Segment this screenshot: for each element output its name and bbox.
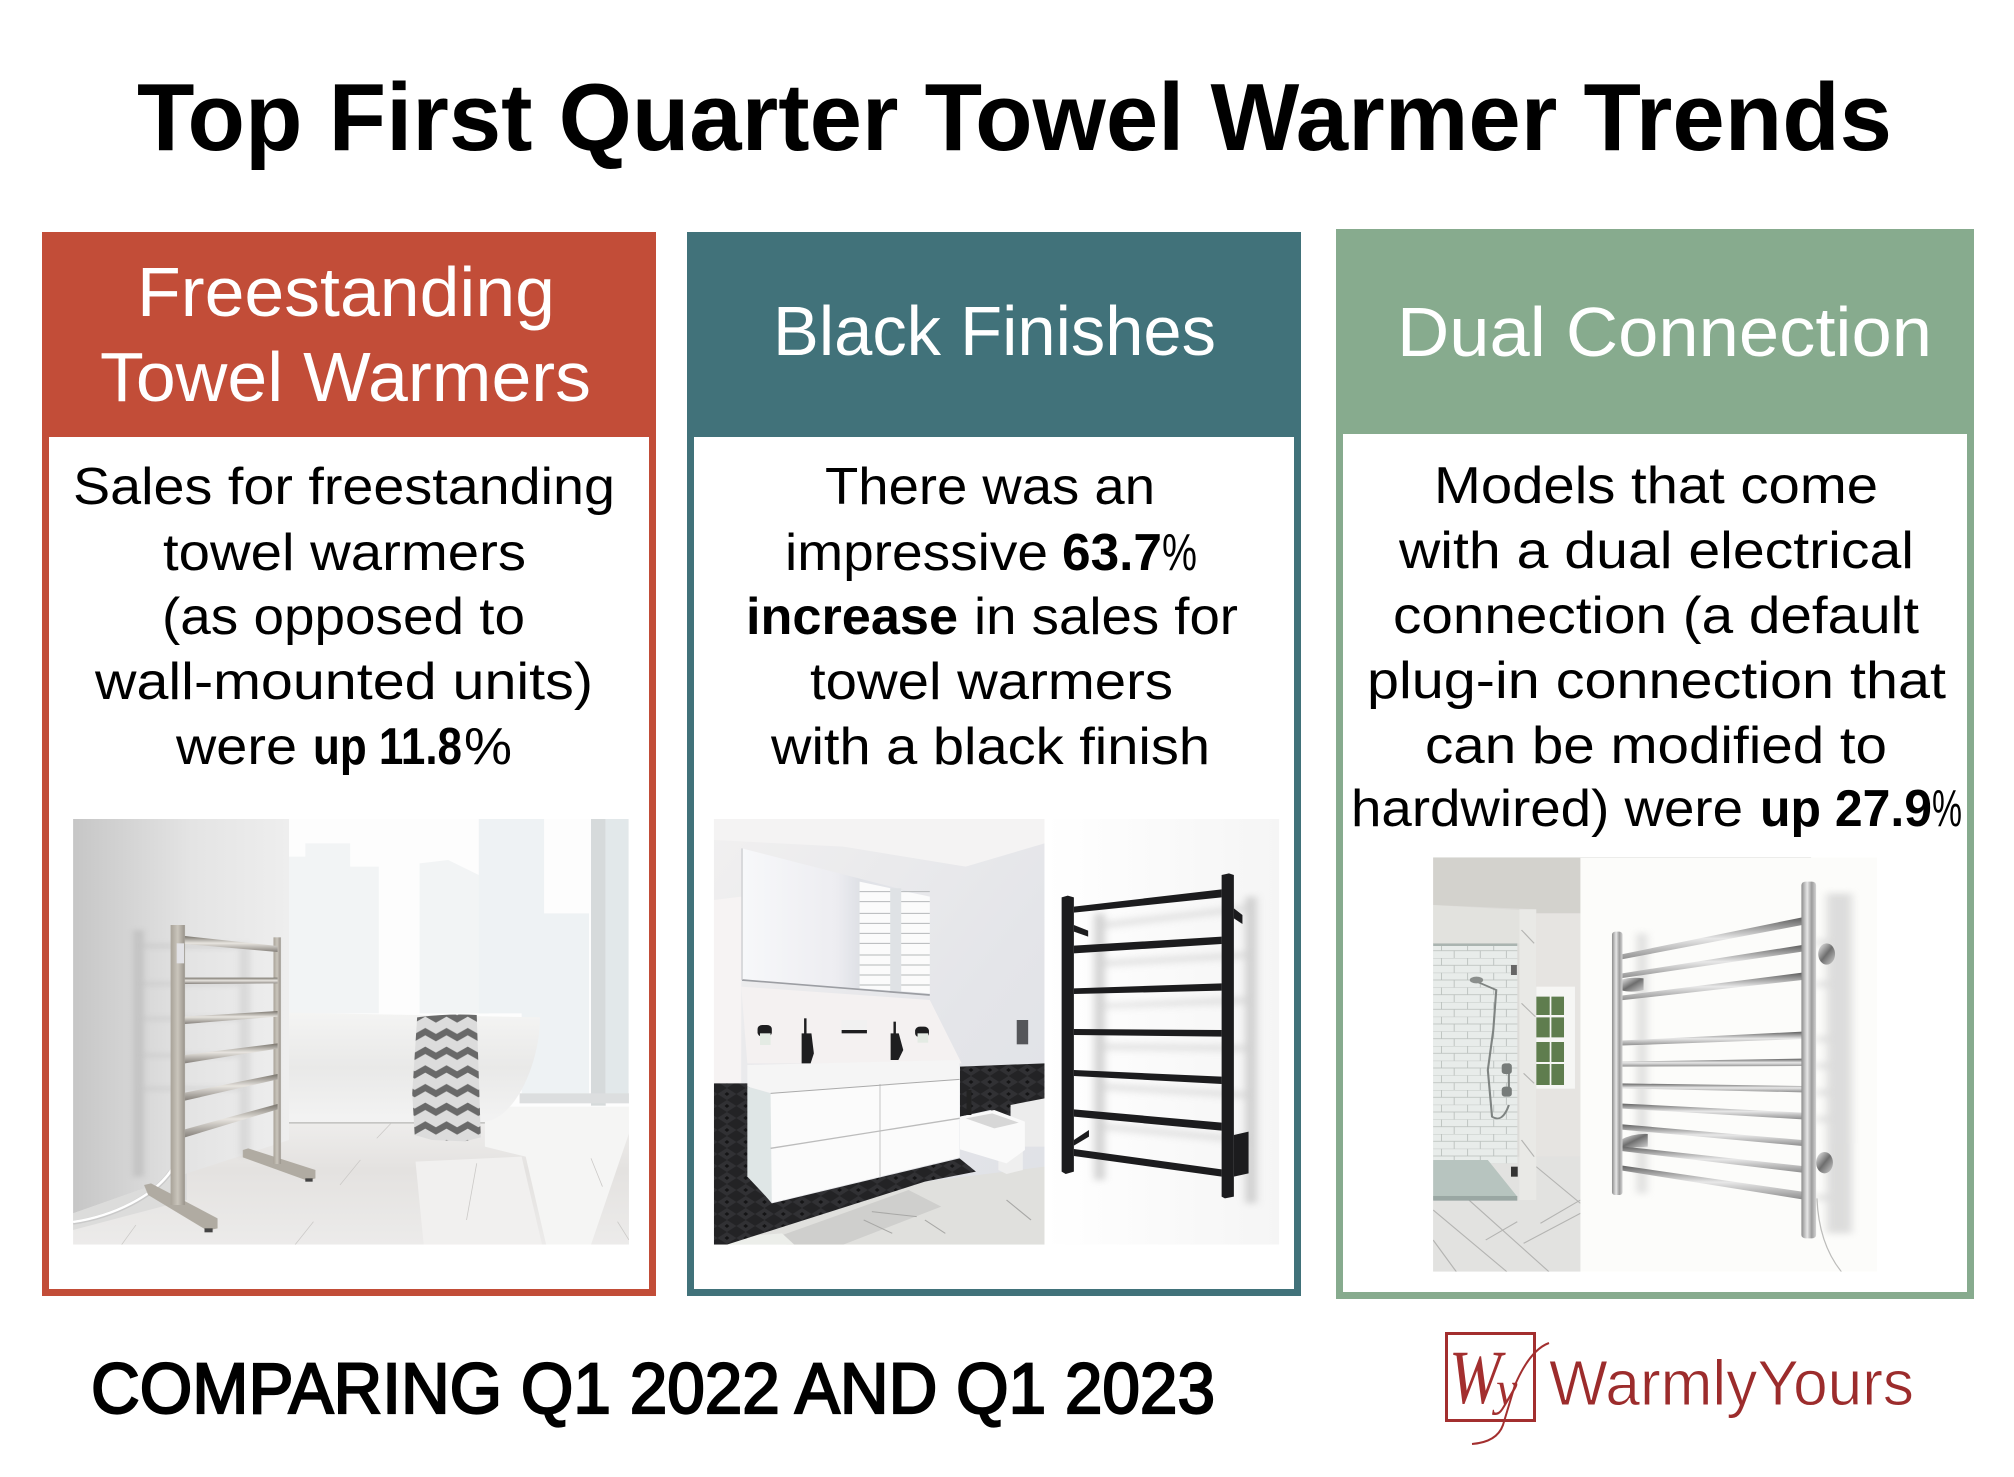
panel 3 text block: hardwired) were	[1351, 780, 1743, 838]
panel 3 text block: connection (a default	[1393, 587, 1920, 645]
floor	[758, 1167, 1044, 1244]
power cord	[73, 1171, 171, 1223]
panel 2 text block: There was an	[825, 458, 1155, 516]
photo: chrome towel warmer and shower	[1433, 857, 1877, 1272]
wall shadow of towel warmer	[133, 930, 250, 1177]
panel 2 text block: impressive	[785, 524, 1048, 582]
panel 2 text block: with a black finish	[770, 718, 1210, 776]
panel: dual connection	[1336, 229, 1974, 1299]
vanity	[747, 1060, 960, 1203]
shower tile wall	[1433, 943, 1517, 1163]
panel 3 heading: Dual Connection	[1397, 293, 1932, 371]
panel 2 heading: Black Finishes	[773, 292, 1216, 370]
wall shadow	[1637, 893, 1852, 1233]
panel 3 text block	[1351, 457, 1962, 838]
black towel warmer	[1062, 873, 1249, 1198]
panel 2 text block: towel warmers	[810, 653, 1173, 711]
panel 1 text block: wall-mounted units)	[94, 653, 593, 711]
chrome towel warmer	[1612, 882, 1835, 1238]
logo wordmark: WarmlyYours	[1549, 1347, 1914, 1419]
power cord	[1817, 1198, 1841, 1272]
window frame	[591, 819, 606, 1106]
panel 2 frame	[687, 232, 1301, 1296]
footer comparison note: COMPARING Q1 2022 AND Q1 2023	[91, 1350, 1215, 1429]
photo: freestanding towel warmer in bathroom	[73, 819, 629, 1245]
bathroom wall	[714, 840, 1044, 1204]
room wall	[1433, 857, 1580, 1272]
shower floor	[1433, 1160, 1517, 1200]
window	[1536, 987, 1575, 1089]
panel 3 text block: with a dual electrical	[1398, 522, 1914, 580]
panel 1 text block: up 11.8	[313, 718, 462, 776]
panel: freestanding towel warmers	[42, 232, 656, 1296]
panel 1 text block: (as opposed to	[162, 588, 525, 646]
wall	[73, 819, 289, 1213]
panel 3 text block: can be modified to	[1425, 717, 1887, 775]
title: Top First Quarter Towel Warmer Trends	[137, 64, 1892, 171]
panel 1 text block: %	[464, 718, 512, 776]
panel: black finishes	[687, 232, 1301, 1296]
mirror	[742, 849, 880, 988]
shower fixtures	[1478, 982, 1510, 1120]
logo monogram	[1446, 1334, 1549, 1444]
floor	[73, 1120, 629, 1245]
panel 2 text block: in sales for	[974, 588, 1238, 646]
product backdrop	[1580, 1200, 1581, 1214]
photo: black towel warmer and bathroom	[714, 819, 1279, 1245]
panel 1 text block	[73, 458, 615, 776]
panel 1 heading: Towel Warmers	[100, 338, 591, 416]
panel 1 text block: were	[175, 718, 297, 776]
panel 2 body background	[694, 437, 1294, 1289]
panel 3 text block: up 27.9	[1760, 780, 1932, 838]
panel 3 text block: %	[1932, 780, 1962, 838]
panel 1 body background	[49, 437, 649, 1289]
wall shadow	[1094, 897, 1257, 1203]
panel 3 frame	[1336, 229, 1974, 1299]
logo monogram: W	[1449, 1336, 1506, 1420]
product backdrop	[1233, 819, 1279, 1244]
logo: WarmlyYours	[1446, 1334, 1914, 1444]
towel on tub	[412, 1015, 481, 1141]
panel 2 text block: increase	[746, 588, 958, 646]
city skyline through window	[289, 819, 589, 1093]
bidet and toilet	[960, 1090, 1044, 1174]
panel 3 body background	[1343, 434, 1967, 1292]
panel 2 text block: %	[1162, 524, 1197, 582]
logo monogram: y	[1491, 1363, 1518, 1416]
panel 1 text block: Sales for freestanding	[73, 458, 615, 516]
panel 1 frame	[42, 232, 656, 1296]
panel 2 text block: 63.7	[1062, 524, 1162, 582]
panel 1 text block: towel warmers	[163, 524, 526, 582]
panel 1 heading	[100, 253, 591, 416]
bathtub	[289, 1013, 540, 1123]
taps and accessories	[758, 1018, 929, 1063]
black tile wainscot	[714, 1083, 976, 1245]
panel 3 text block: Models that come	[1434, 457, 1878, 515]
panel 3 text block: plug-in connection that	[1367, 652, 1947, 710]
panel 1 heading: Freestanding	[137, 253, 555, 331]
towel warmer	[144, 925, 316, 1232]
marble floor	[1433, 1157, 1580, 1272]
panel 2 text block	[746, 458, 1238, 776]
